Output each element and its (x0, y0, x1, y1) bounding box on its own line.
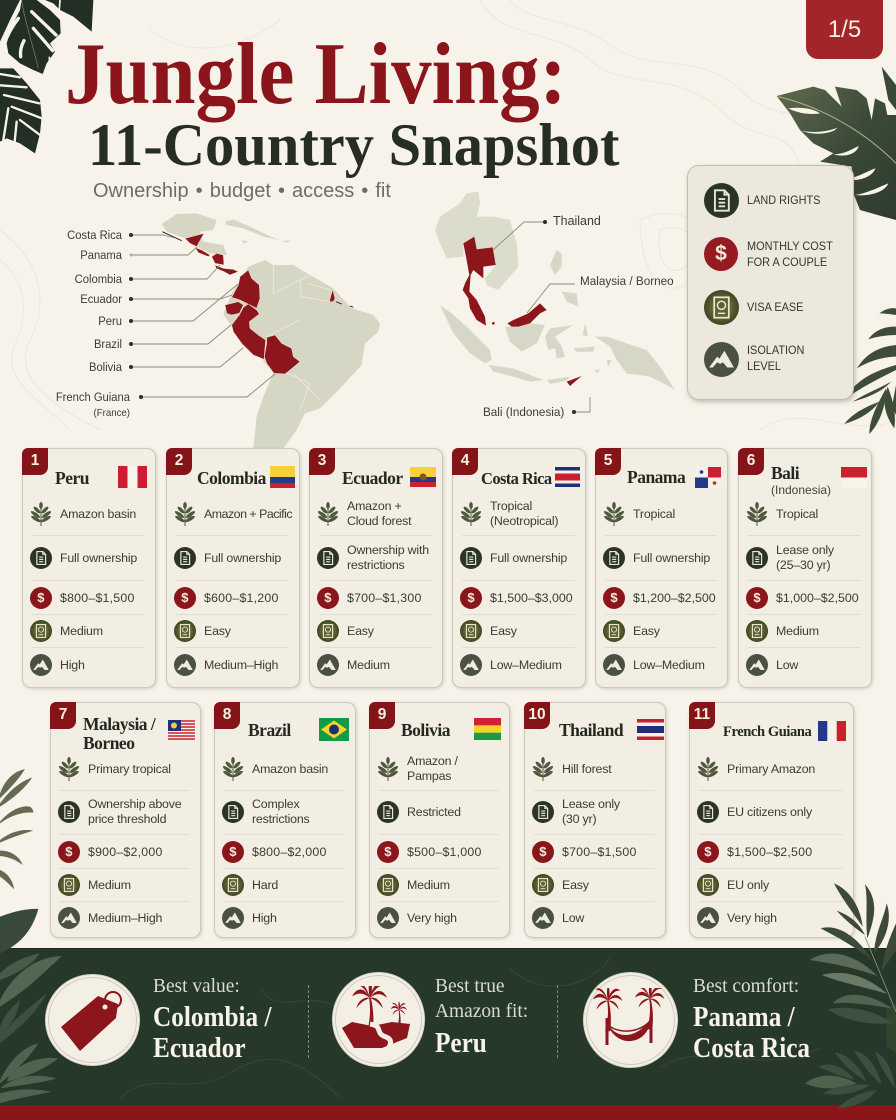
land rights (58, 797, 194, 827)
isolation: High (252, 910, 277, 924)
number: 8 (223, 706, 231, 723)
habitat: Tropical (776, 506, 818, 520)
isolation: Medium (347, 658, 390, 672)
isolation (317, 654, 390, 676)
land rights (377, 797, 503, 827)
habitat: (Neotropical) (490, 514, 558, 528)
isolation: Very high (727, 910, 777, 924)
habitat (222, 754, 349, 784)
land rights (30, 543, 149, 573)
page badge: 1/5 (828, 16, 861, 43)
visa (377, 870, 503, 900)
name: Malaysia / (83, 714, 155, 734)
panel: Colombia (166, 448, 300, 688)
number (689, 702, 715, 729)
isolation (697, 907, 777, 929)
label: Best comfort: (693, 975, 799, 997)
habitat: Primary tropical (88, 762, 171, 776)
visa (532, 870, 659, 900)
legend panel: LEVEL (747, 358, 781, 372)
visa: Medium (60, 624, 103, 638)
number: 5 (604, 452, 612, 469)
cost: $1,200–$2,500 (633, 590, 716, 604)
number: 4 (461, 452, 469, 469)
land rights: Full ownership (204, 550, 281, 564)
isolation (746, 654, 798, 676)
habitat: Amazon + Pacific (204, 506, 292, 520)
map labels: Bolivia (89, 360, 122, 374)
habitat (30, 499, 149, 529)
cost: $ (610, 590, 618, 605)
cost (697, 837, 847, 867)
divider (308, 985, 309, 1058)
number (369, 702, 395, 729)
legend panel: ISOLATION (747, 343, 804, 357)
name: Bali (771, 463, 799, 483)
map: Latin America (162, 213, 380, 448)
habitat: Primary Amazon (727, 762, 815, 776)
habitat: Tropical (490, 499, 532, 513)
legend panel: FOR A COUPLE (747, 254, 827, 268)
habitat: Amazon / (407, 754, 458, 768)
flag (555, 467, 580, 487)
winner: Colombia / (153, 1001, 271, 1033)
winner (153, 1001, 272, 1064)
number (524, 702, 550, 729)
cost: $1,500–$2,500 (727, 844, 812, 858)
map labels: Malaysia / Borneo (580, 274, 674, 288)
number (214, 702, 240, 729)
flag (118, 466, 147, 488)
map labels: (France) (93, 407, 130, 419)
number (22, 448, 48, 475)
land rights: Lease only (776, 543, 834, 557)
land rights (174, 543, 293, 573)
number (738, 448, 764, 475)
visa: Easy (490, 624, 517, 638)
number: 11 (694, 706, 710, 723)
name: Borneo (83, 733, 134, 753)
flag (270, 466, 295, 488)
panel: Malaysia / Borneo (50, 702, 201, 938)
isolation (460, 654, 562, 676)
award: best true Amazon fit (332, 972, 528, 1067)
label: Amazon fit: (435, 1000, 528, 1022)
footer band (0, 948, 896, 1105)
label (435, 974, 528, 1024)
leaves: lower left over cream and footer (0, 769, 62, 1104)
panel: Thailand (524, 702, 666, 938)
icon: price tag (45, 974, 140, 1066)
land rights: Full ownership (633, 550, 710, 564)
habitat: Tropical (633, 506, 675, 520)
habitat (532, 754, 659, 784)
habitat: Amazon basin (252, 762, 328, 776)
land rights: restrictions (252, 812, 310, 826)
award: best value (45, 974, 272, 1066)
isolation (222, 907, 277, 929)
isolation: Medium–High (88, 910, 162, 924)
name: Peru (55, 468, 89, 488)
legend: monthly cost (704, 237, 738, 271)
cost: $ (467, 590, 475, 605)
habitat: Cloud forest (347, 514, 411, 528)
flag (168, 720, 195, 740)
visa: Hard (252, 878, 278, 892)
flag (410, 467, 436, 487)
map labels: French Guiana (56, 390, 130, 404)
cost (222, 837, 349, 867)
isolation: Low–Medium (490, 658, 562, 672)
visa: Easy (562, 878, 589, 892)
land rights: Lease only (562, 797, 620, 811)
panel: Peru (22, 448, 156, 688)
number: 2 (175, 452, 183, 469)
habitat: Amazon basin (60, 506, 136, 520)
cost: $1,000–$2,500 (776, 590, 859, 604)
land rights: restrictions (347, 558, 405, 572)
habitat: Hill forest (562, 762, 611, 776)
number: 10 (528, 706, 546, 723)
name: Thailand (559, 720, 623, 740)
cost (603, 583, 721, 613)
land rights: Complex (252, 797, 300, 811)
isolation (532, 907, 584, 929)
number (595, 448, 621, 475)
divider (557, 985, 558, 1058)
number: 9 (378, 706, 386, 723)
map labels: Costa Rica (67, 228, 122, 242)
map labels: Bali (Indonesia) (483, 405, 564, 419)
land rights: Full ownership (490, 550, 567, 564)
land rights (746, 543, 865, 573)
isolation: High (60, 658, 85, 672)
name (83, 714, 156, 753)
subtitle: Ownership • budget • access • fit (93, 180, 391, 202)
number (166, 448, 192, 475)
habitat (377, 754, 503, 784)
page badge (806, 0, 883, 59)
award: best comfort (583, 972, 823, 1068)
cost (30, 583, 149, 613)
cost (532, 837, 659, 867)
name: Bolivia (401, 720, 450, 740)
land rights (460, 543, 579, 573)
legend: isolation (704, 342, 739, 377)
map labels: Peru (98, 314, 122, 328)
habitat (603, 499, 721, 529)
map labels: Ecuador (80, 292, 122, 306)
cost: $800–$2,000 (252, 844, 327, 858)
cost (377, 837, 503, 867)
panel: Panama (595, 448, 728, 688)
habitat: Amazon + (347, 499, 402, 513)
legend: land rights (704, 183, 739, 218)
isolation (377, 907, 457, 929)
leaves: top left (0, 0, 94, 154)
cost: $900–$2,000 (88, 844, 163, 858)
cost: $ (753, 590, 761, 605)
map labels: Colombia (75, 272, 122, 286)
legend: monthly cost: $ (715, 242, 727, 265)
number (452, 448, 478, 475)
cost (58, 837, 194, 867)
name: Ecuador (342, 468, 403, 488)
land rights (532, 797, 659, 827)
number (50, 702, 76, 729)
legend panel: VISA EASE (747, 300, 803, 314)
winner: Peru (435, 1027, 487, 1059)
habitat (174, 499, 293, 529)
cost: $ (181, 590, 189, 605)
cost (460, 583, 579, 613)
legend panel: LAND RIGHTS (747, 193, 820, 207)
cost: $600–$1,200 (204, 590, 279, 604)
icon: palms and river (332, 972, 425, 1067)
panel: French Guiana (689, 702, 854, 938)
cost (317, 583, 436, 613)
visa: Medium (407, 878, 450, 892)
cost: $ (384, 844, 392, 859)
number (309, 448, 335, 475)
title: 11-Country Snapshot: 11-Country Snapshot (88, 112, 620, 178)
cost: $ (539, 844, 547, 859)
winner: Panama / (693, 1001, 795, 1033)
land rights (317, 543, 436, 573)
label: Best true (435, 975, 505, 997)
land rights (697, 797, 847, 827)
visa: Medium (88, 878, 131, 892)
cost: $700–$1,300 (347, 590, 422, 604)
name: (Indonesia) (771, 483, 831, 497)
cost: $500–$1,000 (407, 844, 482, 858)
land rights: Full ownership (60, 550, 137, 564)
map labels: Thailand (553, 213, 601, 228)
number: 1 (31, 452, 39, 469)
map labels: Brazil (94, 337, 122, 351)
land rights: (25–30 yr) (776, 558, 830, 572)
flag (474, 718, 501, 740)
winner: Ecuador (153, 1032, 246, 1064)
number: 3 (318, 452, 326, 469)
land rights: Restricted (407, 804, 461, 818)
visa (603, 616, 721, 646)
map labels: Panama (80, 248, 122, 262)
isolation: Low–Medium (633, 658, 705, 672)
panel: Bolivia (369, 702, 510, 938)
name: Panama (627, 467, 685, 487)
icon: hammock (583, 972, 678, 1068)
cost: $ (65, 844, 73, 859)
panel: Bali (738, 448, 872, 688)
habitat: Pampas (407, 769, 451, 783)
isolation (30, 654, 85, 676)
flag (637, 719, 664, 740)
cost: $700–$1,500 (562, 844, 637, 858)
isolation (174, 654, 278, 676)
name: Brazil (248, 720, 291, 740)
flag (319, 718, 349, 741)
flag (841, 467, 867, 478)
footer contours (120, 958, 820, 1098)
number: 6 (747, 452, 755, 469)
cost (174, 583, 293, 613)
winner: Costa Rica (693, 1032, 810, 1064)
map leader lines (129, 220, 590, 414)
cost: $ (37, 590, 45, 605)
land rights: Ownership with (347, 543, 429, 557)
visa (697, 870, 847, 900)
land rights: (30 yr) (562, 812, 596, 826)
cost (746, 583, 865, 613)
cost: $800–$1,500 (60, 590, 135, 604)
habitat (460, 499, 579, 529)
isolation: Medium–High (204, 658, 278, 672)
visa: Easy (204, 624, 231, 638)
visa: EU only (727, 878, 769, 892)
cost: $ (324, 590, 332, 605)
panel: Costa Rica (452, 448, 586, 688)
flag (818, 721, 846, 741)
habitat (58, 754, 194, 784)
leaves: lower right over cream and footer (805, 883, 896, 1108)
legend panel: MONTHLY COST (747, 239, 833, 253)
name (771, 463, 831, 497)
leaves: top right monstera (776, 66, 896, 220)
isolation (58, 907, 162, 929)
winner (693, 1002, 810, 1064)
panel: Brazil (214, 702, 356, 938)
land rights: EU citizens only (727, 804, 812, 818)
habitat (697, 754, 847, 784)
name: Costa Rica (481, 469, 552, 488)
map labels (56, 213, 674, 419)
visa: Easy (633, 624, 660, 638)
footer red strip (0, 1105, 896, 1120)
isolation: Low (776, 658, 798, 672)
legend panel (687, 165, 854, 400)
visa (58, 870, 194, 900)
visa (746, 616, 865, 646)
name: French Guiana (723, 724, 811, 740)
habitat (317, 499, 436, 529)
flag (695, 467, 721, 488)
panel: Ecuador (309, 448, 443, 688)
isolation: Very high (407, 910, 457, 924)
map: Southeast Asia (435, 192, 675, 390)
cost: $ (229, 844, 237, 859)
label: Best value: (153, 975, 240, 997)
isolation (603, 654, 705, 676)
visa: Medium (776, 624, 819, 638)
cost: $ (704, 844, 712, 859)
visa (30, 616, 149, 646)
land rights: Ownership above (88, 797, 181, 811)
visa (460, 616, 579, 646)
habitat (746, 499, 865, 529)
number: 7 (59, 706, 67, 723)
visa (317, 616, 436, 646)
leaves: right middle (844, 308, 896, 434)
isolation: Low (562, 910, 584, 924)
land rights: price threshold (88, 812, 166, 826)
land rights (222, 797, 349, 827)
land rights (603, 543, 721, 573)
visa (174, 616, 293, 646)
legend: visa ease (704, 290, 739, 325)
visa (222, 870, 349, 900)
name: Colombia (197, 468, 266, 488)
visa: Easy (347, 624, 374, 638)
cost: $1,500–$3,000 (490, 590, 573, 604)
title: Jungle Living: Jungle Living: (65, 26, 567, 123)
